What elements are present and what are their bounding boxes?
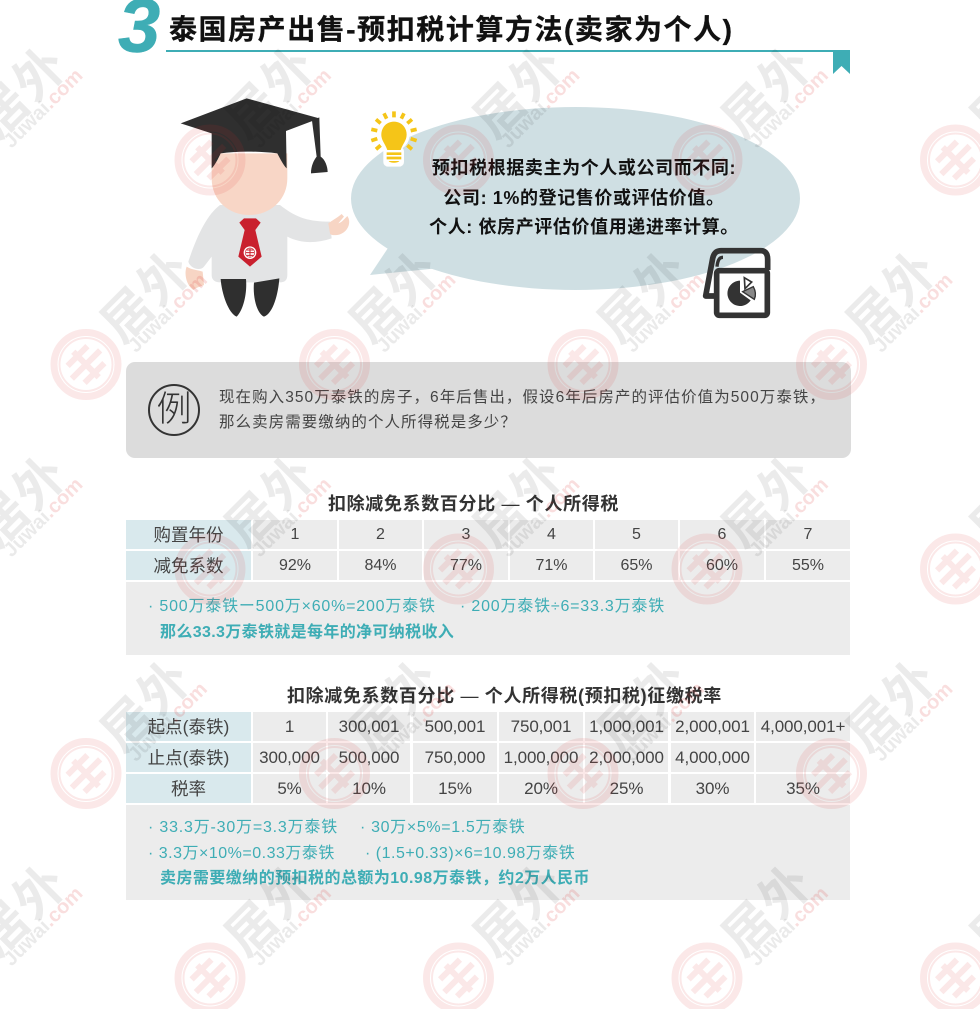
watermark overlay: 居外 xyxy=(463,35,576,148)
table: withholding tax brackets: 税率 xyxy=(171,779,206,799)
table: holding-year reduction: 4 xyxy=(547,526,556,542)
heading: table 2: 扣除减免系数百分比 — 个人所得税(预扣税)征缴税率 xyxy=(287,686,722,706)
table: withholding tax brackets: 750,000 xyxy=(425,748,485,766)
watermark overlay: 居外 xyxy=(587,240,700,353)
table: holding-year reduction: 84% xyxy=(364,556,397,574)
table: withholding tax brackets: 1,000,001 xyxy=(589,716,664,736)
watermark overlay: 居外 xyxy=(214,35,327,148)
formula line: · 3.3万×10%=0.33万泰铁 xyxy=(148,845,335,862)
title underline with ribbon xyxy=(166,50,850,74)
speech bubble text: 个人: 依房产评估价值用递进率计算。 xyxy=(429,217,739,237)
icon: example badge xyxy=(148,384,200,436)
watermark overlay: Juwai.com xyxy=(496,474,584,562)
icon: document with pie chart xyxy=(702,248,770,318)
formula line: · 500万泰铁ー500万×60%=200万泰铁 xyxy=(148,598,436,615)
example question text xyxy=(219,388,826,431)
watermark overlay: Juwai.com xyxy=(745,883,833,971)
watermark overlay: 居外 xyxy=(836,649,949,762)
formula line: · (1.5+0.33)×6=10.98万泰铁 xyxy=(365,845,575,862)
table: holding-year reduction: 1 xyxy=(291,526,299,542)
watermark overlay: 居外 xyxy=(90,649,203,762)
table: withholding tax brackets: 25% xyxy=(610,778,643,798)
table: withholding tax brackets: 15% xyxy=(438,778,472,798)
speech bubble text: 公司: 1%的登记售价或评估价值。 xyxy=(443,188,725,208)
table: withholding tax brackets: 止点(泰铁) xyxy=(148,748,229,768)
watermark overlay: Juwai.com xyxy=(869,269,957,357)
table: holding-year reduction: 3 xyxy=(462,526,470,542)
watermark overlay: Juwai.com xyxy=(745,65,833,153)
table: withholding tax brackets: 10% xyxy=(352,778,386,798)
example panel xyxy=(126,362,851,458)
table: withholding tax brackets: 1 xyxy=(285,716,294,736)
watermark overlay: Juwai.com xyxy=(0,65,87,153)
speech bubble xyxy=(351,107,800,290)
watermark overlay: Juwai.com xyxy=(496,883,584,971)
illustration: graduate character xyxy=(180,98,350,317)
table: withholding tax brackets: 500,000 xyxy=(339,748,399,766)
watermark overlay: 居外 xyxy=(836,240,949,353)
watermark overlay: 居外 xyxy=(711,444,824,557)
example question text: 现在购入350万泰铁的房子，6年后售出，假设6年后房产的评估价值为500万泰铁， xyxy=(219,389,826,406)
watermark overlay: Juwai.com xyxy=(745,474,833,562)
watermark overlay: 居外 xyxy=(214,853,327,966)
formula line: · 33.3万-30万=3.3万泰铁 xyxy=(148,819,338,836)
watermark overlay: 居外 xyxy=(711,853,824,966)
watermark overlay: Juwai.com xyxy=(0,474,87,562)
watermark overlay: Juwai.com xyxy=(248,474,336,562)
watermark overlay: Juwai.com xyxy=(124,269,212,357)
table: holding-year reduction: 77% xyxy=(450,556,482,574)
table: withholding tax brackets: 起点(泰铁) xyxy=(148,717,229,737)
table: withholding tax brackets xyxy=(126,712,850,803)
example question text: 那么卖房需要缴纳的个人所得税是多少？ xyxy=(219,414,517,431)
watermark overlay: 居外 xyxy=(90,240,203,353)
result line: 卖房需要缴纳的预扣税的总额为10.98万泰铁，约2万人民币 xyxy=(160,870,590,887)
page title: 泰国房产出售-预扣税计算方法(卖家为个人) xyxy=(169,14,734,45)
table: withholding tax brackets: 750,001 xyxy=(511,716,571,736)
table: holding-year reduction: 60% xyxy=(706,556,738,574)
watermark overlay: Juwai.com xyxy=(621,678,709,766)
watermark overlay: Juwai.com xyxy=(372,269,460,357)
table: withholding tax brackets: 500,001 xyxy=(425,716,485,736)
watermark overlay: 居外 xyxy=(711,35,824,148)
calculation panel 2 xyxy=(126,805,850,900)
table: withholding tax brackets: 1,000,000 xyxy=(504,748,578,766)
table: withholding tax brackets: 2,000,000 xyxy=(589,748,664,766)
table: holding-year reduction: 减免系数 xyxy=(154,556,224,576)
table: holding-year reduction: 65% xyxy=(620,556,653,574)
watermark overlay: Juwai.com xyxy=(124,678,212,766)
table: holding-year reduction xyxy=(126,520,850,580)
table: withholding tax brackets: 5% xyxy=(277,778,302,798)
watermark overlay: Juwai.com xyxy=(248,65,336,153)
table: withholding tax brackets: 30% xyxy=(696,778,729,798)
watermark overlay: Juwai.com xyxy=(372,678,460,766)
watermark overlay: 居外 xyxy=(587,649,700,762)
table: holding-year reduction: 55% xyxy=(792,556,824,574)
table: withholding tax brackets: 20% xyxy=(524,778,558,798)
heading: table 1: 扣除减免系数百分比 — 个人所得税 xyxy=(328,494,619,514)
watermark overlay: Juwai.com xyxy=(0,883,87,971)
calculation panel 1 xyxy=(126,582,850,655)
table: holding-year reduction: 71% xyxy=(535,556,568,574)
formula line: · 200万泰铁÷6=33.3万泰铁 xyxy=(460,598,665,615)
table: withholding tax brackets: 300,000 xyxy=(259,748,320,766)
watermark overlay: 居外 xyxy=(214,444,327,557)
speech bubble text xyxy=(429,158,739,237)
speech bubble text: 预扣税根据卖主为个人或公司而不同: xyxy=(432,158,736,178)
watermark overlay: 居外 xyxy=(463,853,576,966)
watermark overlay: 居外 xyxy=(339,649,452,762)
watermark overlay: Juwai.com xyxy=(248,883,336,971)
table: withholding tax brackets: 4,000,000 xyxy=(675,748,750,766)
table: holding-year reduction: 2 xyxy=(376,526,385,542)
icon: example badge: 例 xyxy=(156,390,192,429)
result line: 那么33.3万泰铁就是每年的净可纳税收入 xyxy=(160,624,454,641)
table: holding-year reduction: 6 xyxy=(718,526,726,542)
table: withholding tax brackets: 300,001 xyxy=(339,716,399,736)
table: holding-year reduction: 购置年份 xyxy=(154,525,224,545)
table: holding-year reduction: 5 xyxy=(632,526,641,542)
table: holding-year reduction: 92% xyxy=(279,556,311,574)
watermark overlay: Juwai.com xyxy=(496,65,584,153)
table: withholding tax brackets: 35% xyxy=(786,778,820,798)
table: withholding tax brackets: 2,000,001 xyxy=(675,716,750,736)
watermark overlay: 居外 xyxy=(339,240,452,353)
table: withholding tax brackets: 4,000,001+ xyxy=(761,716,845,736)
watermark overlay: 居外 xyxy=(463,444,576,557)
icon: light bulb xyxy=(370,111,418,167)
table: holding-year reduction: 7 xyxy=(804,526,812,542)
watermark overlay: Juwai.com xyxy=(869,678,957,766)
formula line: · 30万×5%=1.5万泰铁 xyxy=(360,819,525,836)
watermark overlay: Juwai.com xyxy=(621,269,709,357)
